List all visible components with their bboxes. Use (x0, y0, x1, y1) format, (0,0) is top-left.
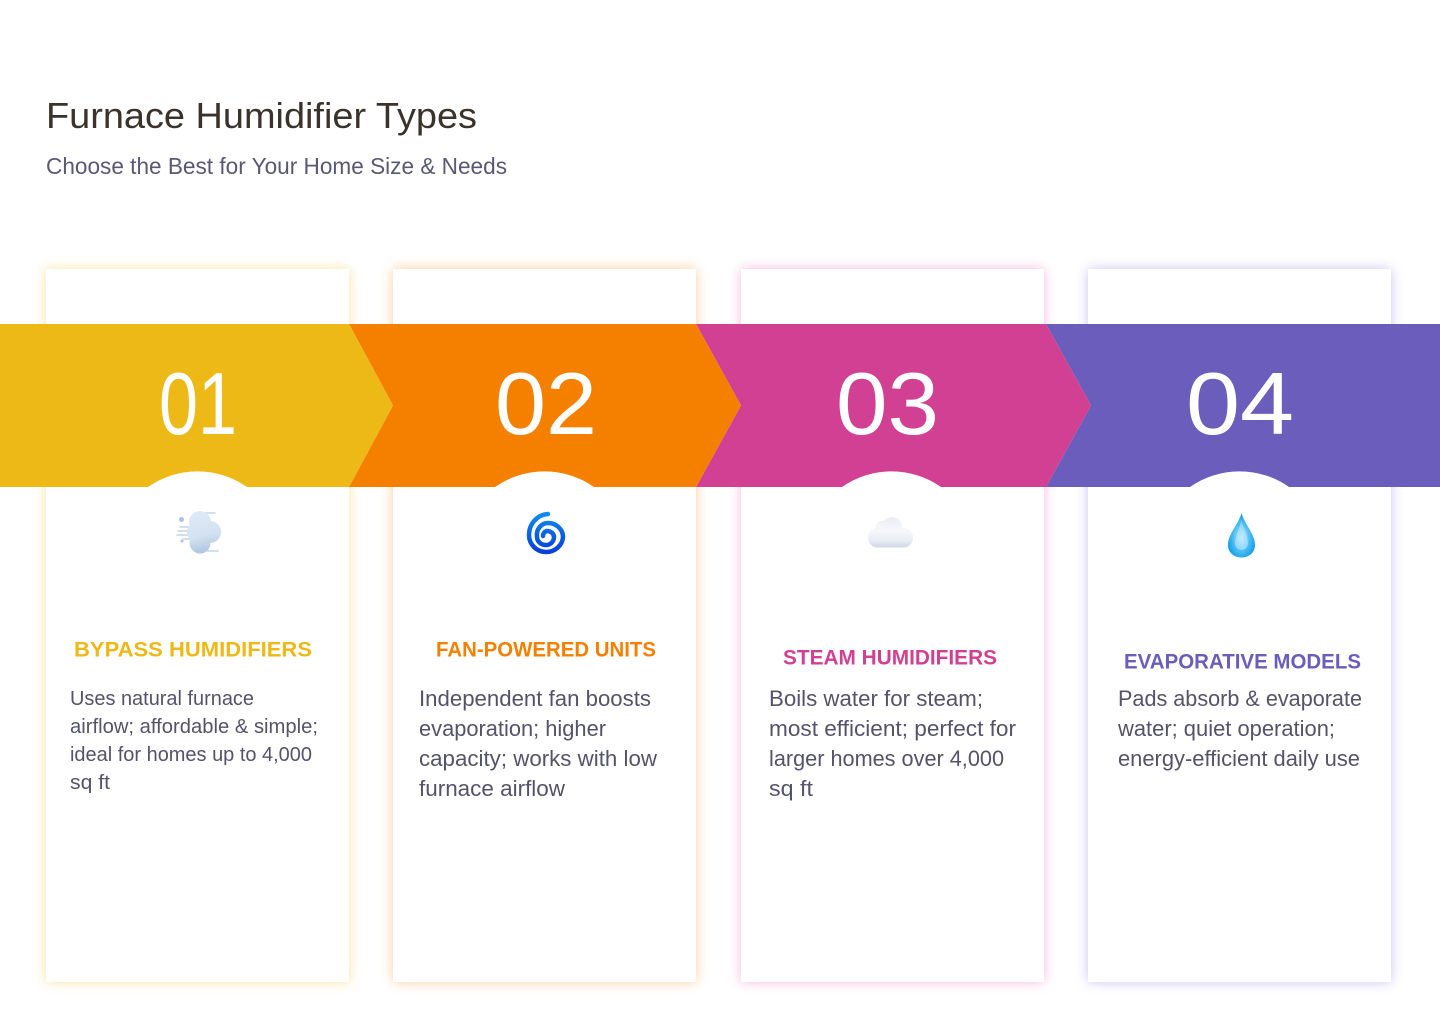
icon circle 4 (1190, 471, 1289, 487)
arrow band: step 4 (1046, 324, 1440, 487)
icon: cloud (868, 517, 913, 548)
text: evaporative description (1117, 686, 1362, 771)
text: evaporative description: water; quiet operation; (1117, 716, 1335, 741)
text: fan-powered description: Independent fan boosts (419, 686, 651, 711)
subtitle: Choose the Best for Your Home Size & Needs (46, 153, 507, 179)
icon circle 3 (842, 471, 941, 487)
number 04: 04 (1186, 354, 1294, 453)
panel: evaporative models text (1117, 650, 1362, 771)
text: bypass description (70, 688, 318, 794)
panel: steam humidifiers text (769, 646, 1016, 801)
icon circle 2 (495, 471, 594, 487)
text: bypass description: ideal for homes up to 4,000 (70, 744, 312, 766)
text: steam description: sq ft (769, 776, 813, 801)
text: fan-powered description: capacity; works with low (419, 746, 657, 771)
panel: bypass humidifiers text (70, 638, 318, 794)
icon: wind puff (177, 511, 221, 554)
number 01: 01 (159, 354, 237, 453)
arrow band: step 2 (349, 324, 741, 487)
text: bypass description: airflow; affordable & simple; (70, 716, 318, 738)
icon circle 1 (148, 471, 247, 487)
text: evaporative description: energy-efficient daily use (1118, 746, 1360, 771)
number 03: 03 (836, 354, 939, 453)
panel: card 4 background (1088, 269, 1391, 982)
text: fan-powered description: furnace airflow (419, 776, 565, 801)
heading: fan-powered units: FAN-POWERED UNITS (436, 638, 656, 662)
number 02: 02 (495, 354, 597, 453)
text: steam description: most efficient; perfect for (769, 716, 1016, 741)
text: steam description (769, 686, 1016, 801)
heading: evaporative models: EVAPORATIVE MODELS (1124, 650, 1361, 674)
panel: card 2 background (393, 269, 696, 982)
title: Furnace Humidifier Types (46, 95, 477, 136)
text: fan-powered description: evaporation; higher (419, 716, 606, 741)
arrow band: step 1 (0, 324, 393, 487)
icon: water drop (1228, 513, 1255, 558)
text: steam description: larger homes over 4,000 (769, 746, 1004, 771)
heading: bypass humidifiers: BYPASS HUMIDIFIERS (74, 638, 312, 662)
text: bypass description: Uses natural furnace (70, 688, 254, 710)
panel: card 1 background (46, 269, 349, 982)
text: evaporative description: Pads absorb & evaporate (1118, 686, 1362, 711)
icon: spiral (529, 514, 563, 552)
heading: steam humidifiers: STEAM HUMIDIFIERS (783, 646, 997, 670)
panel: card 3 background (741, 269, 1044, 982)
text: fan-powered description (419, 686, 657, 801)
arrow band: step 3 (696, 324, 1091, 487)
text: bypass description: sq ft (70, 772, 110, 794)
text: steam description: Boils water for steam; (769, 686, 983, 711)
panel: fan-powered units text (419, 638, 657, 801)
